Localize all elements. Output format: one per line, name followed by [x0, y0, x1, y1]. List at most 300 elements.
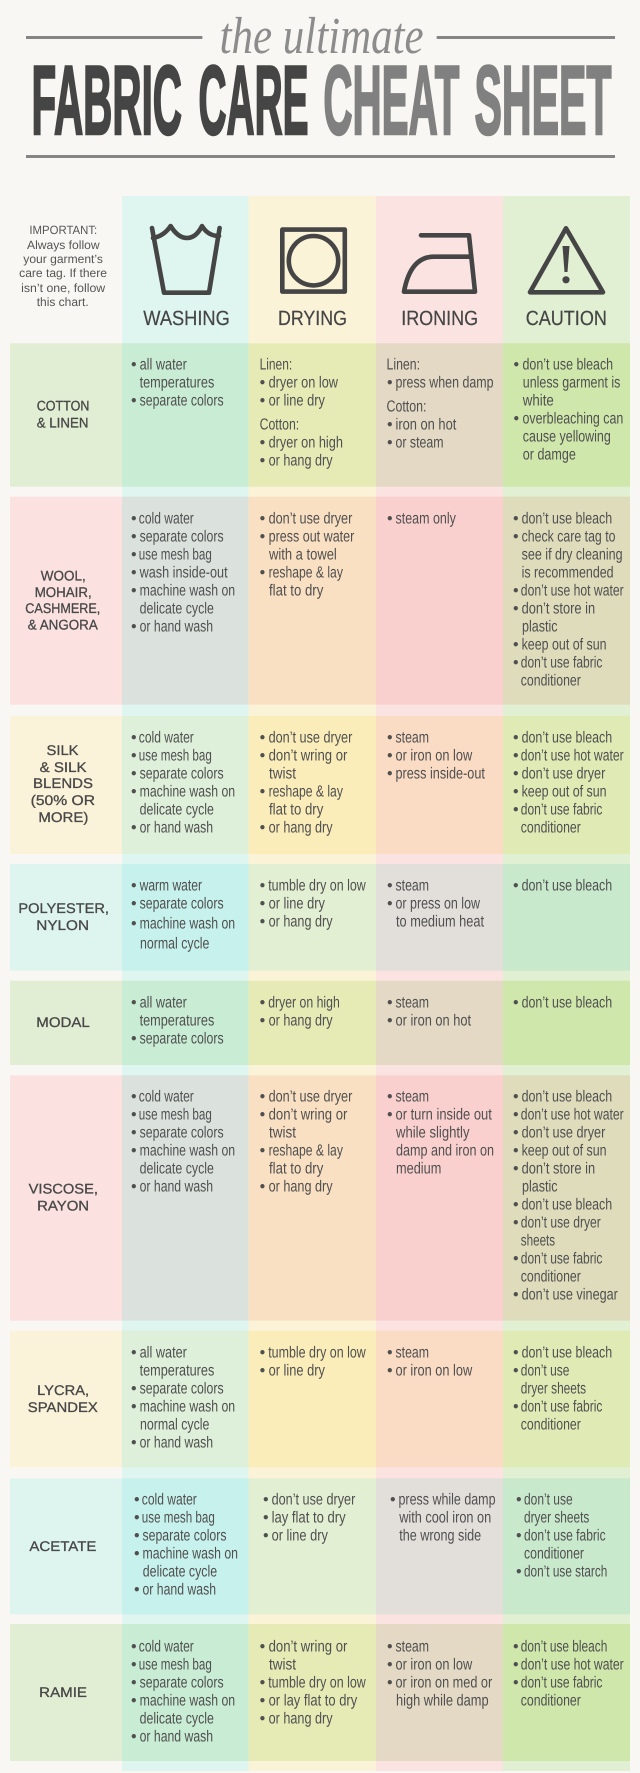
cell: silk drying: • [260, 783, 265, 800]
icon: warning triangle [530, 228, 603, 292]
cell: acetate ironing [376, 1478, 503, 1614]
cell: silk washing: separate colors [140, 765, 224, 782]
cell: ramie drying [249, 1624, 376, 1761]
cell: acetate ironing: with cool iron on [398, 1510, 491, 1527]
cell: viscose caution: • [513, 1250, 519, 1267]
cell: viscose caution: • [513, 1160, 519, 1177]
note: important: isn’t one, follow [21, 281, 106, 295]
cell: modal drying: or hang dry [269, 1012, 333, 1029]
cell: wool washing: • [131, 528, 137, 545]
cell: cotton caution: • [514, 356, 519, 373]
cell: wool drying: with a towel [268, 546, 337, 563]
cell: wool washing: cold water [139, 510, 194, 527]
cell: viscose drying: don’t use dryer [269, 1088, 353, 1105]
cell: wool drying: • [260, 564, 265, 581]
row label: lycra [10, 1331, 122, 1467]
cell: lycra washing: or hand wash [140, 1434, 213, 1451]
cell: cotton drying: dryer on low [269, 374, 338, 391]
cell: acetate caution: • [516, 1528, 522, 1545]
row label: wool: WOOL, [41, 567, 86, 583]
icon: iron [404, 235, 475, 292]
cell: polyester washing [122, 864, 249, 971]
row: silk [10, 716, 630, 854]
heading: ironing: IRONING [401, 307, 478, 330]
row label: silk: MORE) [38, 809, 88, 825]
cell: silk ironing: steam [396, 729, 429, 746]
row: cotton & linen [10, 343, 630, 487]
cell: viscose drying: • [260, 1142, 265, 1159]
row label: wool [10, 497, 122, 705]
cell: silk caution: • [513, 765, 519, 782]
cell: lycra caution [503, 1331, 630, 1467]
cell: acetate caution: • [516, 1564, 522, 1581]
cell: silk ironing: • [387, 747, 393, 764]
cell: silk ironing: or iron on low [396, 747, 473, 764]
column: ironing [376, 196, 503, 1771]
cell: viscose washing: delicate cycle [140, 1160, 214, 1177]
cell: acetate washing: cold water [142, 1492, 197, 1509]
cell: polyester washing: • [131, 915, 137, 932]
row label: silk: SILK [46, 742, 79, 758]
cell: acetate washing: • [134, 1528, 140, 1545]
cell: wool caution: • [513, 510, 519, 527]
cell: polyester washing: normal cycle [140, 935, 209, 952]
cell: cotton drying: Cotton: [260, 416, 299, 433]
cell: ramie ironing: or iron on low [396, 1656, 473, 1673]
cell: cotton caution [503, 343, 630, 487]
cell: ramie ironing: steam [396, 1638, 429, 1655]
cell: silk drying: • [260, 747, 265, 764]
cell: modal ironing: • [387, 1012, 393, 1029]
cell: acetate ironing: the wrong side [399, 1528, 481, 1545]
cell: viscose ironing: • [387, 1088, 393, 1105]
cell: cotton drying: or line dry [269, 392, 325, 409]
cell: cotton washing [122, 343, 249, 487]
cell: wool washing: • [131, 618, 137, 635]
cell: ramie washing [122, 1624, 249, 1761]
cell: cotton drying: • [260, 434, 265, 451]
cell: ramie caution: • [513, 1638, 519, 1655]
note: important: care tag. If there [19, 266, 107, 280]
cell: wool caution: • [513, 582, 519, 599]
cell: acetate drying: lay flat to dry [272, 1510, 346, 1527]
cell: silk drying: reshape & lay [269, 783, 343, 800]
cell: polyester ironing: • [387, 895, 393, 912]
cell: ramie drying: • [260, 1674, 265, 1691]
cell: acetate ironing: • [390, 1492, 396, 1509]
cell: polyester caution: • [513, 877, 519, 894]
cell: wool washing: or hand wash [140, 618, 213, 635]
note: important: your garment’s [23, 252, 103, 266]
cell: acetate washing: separate colors [142, 1528, 226, 1545]
cell: acetate caution: dryer sheets [524, 1510, 589, 1527]
cell: ramie washing: use mesh bag [139, 1656, 212, 1673]
cell: polyester drying: • [260, 913, 265, 930]
row label: wool: & ANGORA [28, 617, 98, 633]
cell: wool ironing: • [387, 510, 393, 527]
cell: acetate caution: don’t use fabric [524, 1528, 606, 1545]
cell: viscose ironing: medium [396, 1160, 441, 1177]
cell: lycra drying: tumble dry on low [268, 1344, 366, 1361]
cell: ramie drying: tumble dry on low [268, 1674, 366, 1691]
title: the ultimate: the ultimate [220, 8, 424, 65]
cell: silk washing: • [131, 729, 137, 746]
cell: cotton drying: • [260, 392, 265, 409]
cell: viscose washing: separate colors [140, 1124, 224, 1141]
cell: lycra caution: • [513, 1362, 519, 1379]
cell: modal washing: • [131, 994, 137, 1011]
cell: wool caution: check care tag to [522, 528, 616, 545]
cell: wool washing: machine wash on [140, 582, 235, 599]
cell: silk washing: cold water [139, 729, 194, 746]
cell: wool washing [122, 497, 249, 705]
cell: cotton ironing: press when damp [396, 374, 494, 391]
cell: ramie washing: machine wash on [140, 1692, 235, 1709]
cell: viscose ironing: while slightly [395, 1124, 470, 1141]
cell: viscose caution: • [513, 1142, 519, 1159]
row label: cotton & linen: COTTON [37, 398, 89, 414]
cell: viscose washing: cold water [139, 1088, 194, 1105]
cell: lycra drying: • [260, 1344, 265, 1361]
cell: cotton drying: or hang dry [269, 452, 333, 469]
cell: silk washing: • [131, 765, 137, 782]
cell: silk caution: • [513, 729, 519, 746]
row: ramie [10, 1624, 630, 1761]
cell: viscose ironing: steam [396, 1088, 429, 1105]
cell: viscose ironing: • [387, 1106, 393, 1123]
cell: viscose washing: • [131, 1106, 137, 1123]
cell: acetate caution: don’t use [524, 1492, 573, 1509]
cell: ramie ironing: • [387, 1656, 393, 1673]
cell: ramie caution: • [513, 1656, 519, 1673]
cell: wool caution: conditioner [521, 672, 581, 689]
row label: wool: CASHMERE, [25, 600, 100, 616]
cell: wool caution [503, 497, 630, 705]
cell: viscose drying: • [260, 1178, 265, 1195]
cell: silk drying: • [260, 819, 265, 836]
cell: wool caution: don’t store in [522, 600, 595, 617]
cell: acetate drying: or line dry [272, 1528, 328, 1545]
cell: silk drying [249, 716, 376, 854]
heading: caution: CAUTION [526, 307, 607, 330]
cell: viscose caution: don’t use bleach [522, 1088, 612, 1105]
row label: lycra: LYCRA, [37, 1382, 89, 1398]
row label: lycra: SPANDEX [28, 1399, 98, 1415]
cell: lycra caution: dryer sheets [521, 1380, 586, 1397]
cell: modal ironing [376, 981, 503, 1065]
cell: acetate drying: • [263, 1510, 269, 1527]
cell: acetate ironing: press while damp [398, 1492, 496, 1509]
cell: ramie washing: or hand wash [140, 1728, 213, 1745]
cell: silk caution: keep out of sun [522, 783, 607, 800]
cell: cotton ironing [376, 343, 503, 487]
cell: silk drying: flat to dry [269, 801, 323, 818]
cell: lycra drying: or line dry [269, 1362, 325, 1379]
cell: silk ironing: press inside-out [396, 765, 485, 782]
cell: viscose ironing: or turn inside out [396, 1106, 492, 1123]
cell: acetate washing: delicate cycle [143, 1564, 217, 1581]
cell: acetate caution [503, 1478, 630, 1614]
row label: silk [10, 716, 122, 854]
row label: cotton & linen [10, 343, 122, 487]
cell: wool drying [249, 497, 376, 705]
cell: wool ironing: steam only [396, 510, 456, 527]
cell: viscose caution: • [513, 1124, 519, 1141]
cell: polyester washing: machine wash on [140, 915, 235, 932]
cell: lycra caution: • [513, 1398, 519, 1415]
column: caution [503, 196, 630, 1771]
cell: wool caution: • [513, 636, 519, 653]
cell: wool drying: • [260, 528, 265, 545]
row: acetate [10, 1478, 630, 1614]
cell: cotton washing: all water [140, 356, 187, 373]
cell: silk washing [122, 716, 249, 854]
cell: acetate washing: or hand wash [142, 1582, 216, 1599]
cell: polyester drying: • [260, 877, 265, 894]
cell: ramie ironing: • [387, 1638, 393, 1655]
cell: acetate washing: • [134, 1510, 140, 1527]
cell: lycra washing: • [131, 1380, 137, 1397]
cell: modal drying: • [260, 994, 265, 1011]
cell: wool caution: don’t use fabric [521, 654, 602, 671]
cell: lycra washing [122, 1331, 249, 1467]
row label: acetate [10, 1478, 122, 1614]
cell: viscose caution: conditioner [521, 1268, 581, 1285]
cell: polyester drying [249, 864, 376, 971]
row label: polyester [10, 864, 122, 971]
cell: viscose caution: • [513, 1286, 519, 1303]
cell: silk washing: delicate cycle [140, 801, 214, 818]
cell: silk caution: don’t use bleach [522, 729, 612, 746]
cell: modal ironing: or iron on hot [396, 1012, 471, 1029]
cell: modal drying: dryer on high [268, 994, 340, 1011]
cell: cotton ironing: iron on hot [396, 416, 457, 433]
row: wool, mohair, cashmere & angora [10, 497, 630, 705]
cell: lycra caution: don’t use [521, 1362, 569, 1379]
cell: silk ironing [376, 716, 503, 854]
cell: ramie washing: • [131, 1674, 137, 1691]
cell: acetate drying: don’t use dryer [272, 1492, 356, 1509]
cell: ramie drying: • [260, 1638, 265, 1655]
cell: modal drying: • [260, 1012, 265, 1029]
cell: viscose washing: • [131, 1124, 137, 1141]
cell: ramie caution: don’t use bleach [521, 1638, 607, 1655]
cell: viscose caution: don’t use dryer [522, 1124, 606, 1141]
cell: modal washing [122, 981, 249, 1065]
cell: cotton washing: separate colors [140, 392, 224, 409]
cell: cotton caution: don’t use bleach [522, 356, 613, 373]
cell: ramie washing: • [131, 1656, 137, 1673]
cell: acetate washing [122, 1478, 249, 1614]
cell: viscose caution: sheets [521, 1232, 555, 1249]
cell: viscose caution: • [513, 1106, 519, 1123]
cell: lycra caution: conditioner [521, 1416, 581, 1433]
row: modal [10, 981, 630, 1065]
cell: lycra ironing: or iron on low [396, 1362, 473, 1379]
cell: polyester ironing: • [387, 877, 393, 894]
cell: silk washing: machine wash on [140, 783, 235, 800]
cell: viscose caution [503, 1075, 630, 1321]
cell: silk washing: • [131, 747, 137, 764]
cell: ramie caution [503, 1624, 630, 1761]
cell: ramie washing: • [131, 1692, 137, 1709]
cell: lycra caution: • [513, 1344, 519, 1361]
cell: ramie ironing [376, 1624, 503, 1761]
row label: modal [10, 981, 122, 1065]
cell: lycra caution: don’t use fabric [521, 1398, 602, 1415]
cell: wool drying: • [260, 510, 265, 527]
cell: acetate washing: use mesh bag [142, 1510, 215, 1527]
title: fabric care: FABRIC [32, 45, 182, 155]
cell: acetate washing: • [134, 1546, 140, 1563]
cell: lycra ironing: • [387, 1362, 393, 1379]
cell: ramie washing: cold water [139, 1638, 194, 1655]
cell: ramie ironing: high while damp [396, 1692, 489, 1709]
cell: polyester drying: • [260, 895, 265, 912]
row label: modal: MODAL [36, 1014, 90, 1030]
cell: lycra ironing: • [387, 1344, 393, 1361]
cell: viscose caution: keep out of sun [522, 1142, 607, 1159]
cell: silk washing: or hand wash [140, 819, 213, 836]
cell: silk drying: • [260, 729, 265, 746]
cell: cotton caution: white [522, 392, 554, 409]
title block: CARE [198, 45, 308, 155]
cell: acetate washing: • [134, 1492, 140, 1509]
cell: wool caution: • [513, 528, 519, 545]
cell: cotton ironing: • [387, 434, 393, 451]
cell: cotton ironing: • [387, 416, 393, 433]
cell: ramie washing: delicate cycle [140, 1710, 214, 1727]
cell: viscose drying: • [260, 1106, 265, 1123]
cell: lycra washing: machine wash on [140, 1398, 235, 1415]
cell: wool ironing [376, 497, 503, 705]
cell: modal drying [249, 981, 376, 1065]
cell: cotton drying: • [260, 452, 265, 469]
cell: polyester ironing [376, 864, 503, 971]
cell: cotton drying: • [260, 374, 265, 391]
cell: lycra washing: temperatures [140, 1362, 214, 1379]
row: viscose, rayon [10, 1075, 630, 1321]
cell: lycra washing: • [131, 1398, 137, 1415]
cell: silk caution: conditioner [521, 819, 581, 836]
row label: acetate: ACETATE [29, 1538, 96, 1554]
cell: viscose caution: don’t store in [522, 1160, 595, 1177]
cell: acetate drying [249, 1478, 376, 1614]
cell: silk drying: don’t use dryer [269, 729, 353, 746]
row: lycra, spandex [10, 1331, 630, 1467]
cell: ramie caution: don’t use fabric [521, 1674, 602, 1691]
row label: silk: (50% OR [31, 792, 95, 808]
cell: cotton caution: cause yellowing [523, 428, 611, 445]
cell: modal washing: temperatures [140, 1012, 214, 1029]
row label: ramie: RAMIE [39, 1684, 87, 1700]
cell: silk washing: use mesh bag [139, 747, 212, 764]
row label: polyester: POLYESTER, [18, 900, 109, 916]
heading: washing: WASHING [143, 307, 230, 330]
cell: cotton drying [249, 343, 376, 487]
cell: wool caution: • [513, 600, 519, 617]
cell: silk caution [503, 716, 630, 854]
cell: acetate drying: • [263, 1528, 269, 1545]
cell: silk washing: • [131, 783, 137, 800]
cell: modal ironing: • [387, 994, 393, 1011]
cell: cotton ironing: • [387, 374, 393, 391]
cell: viscose ironing [376, 1075, 503, 1321]
cell: viscose drying: • [260, 1088, 265, 1105]
cell: silk washing: • [131, 819, 137, 836]
cell: ramie drying: twist [269, 1656, 296, 1673]
cell: acetate caution: conditioner [524, 1546, 585, 1563]
cell: viscose caution: don’t use bleach [522, 1196, 612, 1213]
cell: polyester washing: • [131, 895, 137, 912]
cell: cotton ironing: Linen: [386, 356, 420, 373]
cell: cotton caution: or damge [523, 446, 576, 463]
cell: lycra caution: don’t use bleach [522, 1344, 612, 1361]
row label: silk: & SILK [40, 759, 87, 775]
cell: viscose caution: • [513, 1196, 519, 1213]
cell: silk caution: don’t use dryer [522, 765, 606, 782]
row label: viscose [10, 1075, 122, 1321]
cell: viscose washing: • [131, 1142, 137, 1159]
cell: modal caution [503, 981, 630, 1065]
cell: lycra ironing: steam [396, 1344, 429, 1361]
cell: silk caution: • [513, 783, 519, 800]
cell: polyester ironing: or press on low [396, 895, 480, 912]
cell: viscose caution: plastic [522, 1178, 558, 1195]
cell: acetate drying: • [263, 1492, 269, 1509]
icon: tumble dry square [282, 230, 345, 292]
cell: wool washing: • [131, 564, 137, 581]
cell: viscose caution: don’t use fabric [521, 1250, 602, 1267]
cell: polyester washing: • [131, 877, 137, 894]
cell: polyester drying: tumble dry on low [268, 877, 366, 894]
cell: wool drying: flat to dry [269, 582, 323, 599]
cell: lycra washing: normal cycle [140, 1416, 209, 1433]
cell: viscose washing: machine wash on [140, 1142, 235, 1159]
cell: ramie ironing: or iron on med or [396, 1674, 493, 1691]
cell: ramie washing: • [131, 1728, 137, 1745]
cell: wool caution: don’t use bleach [522, 510, 612, 527]
cell: wool washing: • [131, 546, 137, 563]
icon: wash tub [152, 226, 220, 293]
cell: polyester ironing: steam [396, 877, 429, 894]
row label: wool: MOHAIR, [35, 584, 92, 600]
cell: cotton washing: • [131, 356, 137, 373]
cell: wool drying: reshape & lay [269, 564, 343, 581]
cell: modal washing: • [131, 1030, 137, 1047]
cell: acetate washing: machine wash on [142, 1546, 238, 1563]
cell: polyester drying: or hang dry [269, 913, 333, 930]
cell: viscose washing: • [131, 1178, 137, 1195]
cell: viscose caution: don’t use vinegar [522, 1286, 618, 1303]
column: washing [122, 196, 249, 1771]
note: important: Always follow [27, 238, 100, 252]
cell: acetate caution: don’t use starch [524, 1564, 607, 1581]
cell: wool washing: delicate cycle [140, 600, 214, 617]
cell: viscose ironing: damp and iron on [396, 1142, 494, 1159]
row label: cotton & linen: & LINEN [37, 415, 88, 431]
cell: ramie drying: don’t wring or [269, 1638, 348, 1655]
cell: lycra washing: separate colors [140, 1380, 224, 1397]
cell: lycra drying: • [260, 1362, 265, 1379]
row label: polyester: NYLON [36, 917, 89, 933]
cell: viscose caution: don’t use dryer [521, 1214, 601, 1231]
cell: silk caution: don’t use fabric [521, 801, 602, 818]
cell: ramie drying: or hang dry [269, 1710, 333, 1727]
cell: wool caution: keep out of sun [522, 636, 607, 653]
row label: viscose: VISCOSE, [29, 1181, 98, 1197]
cell: cotton ironing: Cotton: [386, 398, 426, 415]
